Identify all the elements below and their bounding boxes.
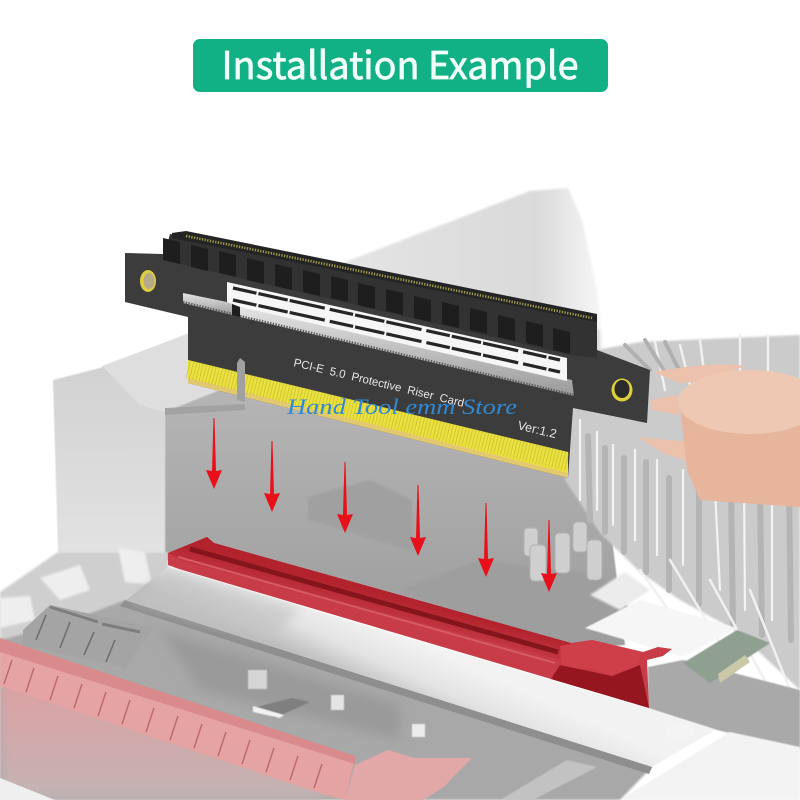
title banner: Installation Example — [222, 35, 578, 90]
fan hub side — [680, 400, 800, 507]
panel top ledge — [165, 404, 245, 415]
pink faded slot — [0, 638, 472, 800]
heatsink — [565, 335, 800, 690]
white highlights — [0, 548, 152, 628]
pink lower body — [0, 680, 340, 800]
gray connector — [23, 605, 153, 668]
left panel — [53, 333, 245, 552]
arrow 5 — [478, 503, 494, 577]
radial fins — [580, 335, 791, 690]
right board behind slot — [400, 560, 640, 650]
riser card — [125, 231, 650, 478]
connector pin strip — [172, 231, 597, 322]
shadow under bar — [160, 630, 400, 740]
connector pin dots — [186, 236, 592, 318]
gold fingers — [188, 360, 568, 478]
latch shadow — [551, 665, 649, 708]
white board highlights — [590, 572, 650, 610]
arrow 1 — [206, 418, 222, 489]
slot groove — [190, 549, 558, 652]
small board components — [248, 670, 425, 737]
connector pockets — [163, 238, 570, 354]
arrow 3 — [337, 462, 353, 533]
PCB body — [125, 253, 650, 478]
silver bar — [120, 567, 715, 774]
red PCIe slot — [168, 537, 672, 708]
pink rim — [0, 638, 355, 764]
bar post — [666, 723, 694, 741]
white M.2 card — [585, 600, 737, 657]
left board surface — [0, 552, 168, 650]
dark component block — [308, 480, 412, 552]
bar left shade — [130, 570, 300, 640]
pink slits — [4, 660, 322, 788]
slot body — [168, 537, 672, 708]
slot rim highlight — [178, 557, 555, 663]
watermark: Hand Tool emm Store — [286, 394, 517, 419]
fan — [637, 364, 800, 507]
arrow 6 — [541, 520, 557, 592]
bottom gray strip — [500, 760, 597, 800]
arrow 2 — [264, 441, 280, 512]
pink slot latch — [345, 750, 472, 800]
left mounting hole — [140, 270, 156, 292]
right board — [648, 660, 800, 750]
right mounting hole — [612, 378, 632, 402]
white slot — [227, 282, 567, 381]
arrow 4 — [410, 485, 426, 556]
version label: Ver:1.2 — [516, 418, 558, 441]
latch — [560, 640, 643, 676]
pink pocket band — [0, 640, 355, 800]
faded motherboard scene — [0, 188, 800, 800]
slot notch — [237, 358, 245, 402]
bottom right white panel — [620, 732, 800, 800]
fan hub top — [678, 370, 800, 434]
M.2 connector — [683, 630, 770, 683]
M.2 pins — [718, 655, 750, 683]
slot top face — [168, 537, 571, 660]
silver pins — [183, 293, 574, 396]
upper left seam panel — [102, 333, 245, 412]
capacitors — [524, 522, 602, 581]
heatsink body — [565, 335, 800, 690]
fan blades — [637, 364, 800, 480]
lower board — [0, 600, 652, 800]
PCB label: PCI-E 5.0 Protective Riser Card — [292, 357, 465, 410]
dark central panel — [165, 380, 625, 650]
bottom left white strip — [0, 778, 55, 800]
back wall behind card — [190, 264, 600, 420]
rear bracket plate — [340, 188, 604, 350]
connector housing — [163, 234, 597, 358]
